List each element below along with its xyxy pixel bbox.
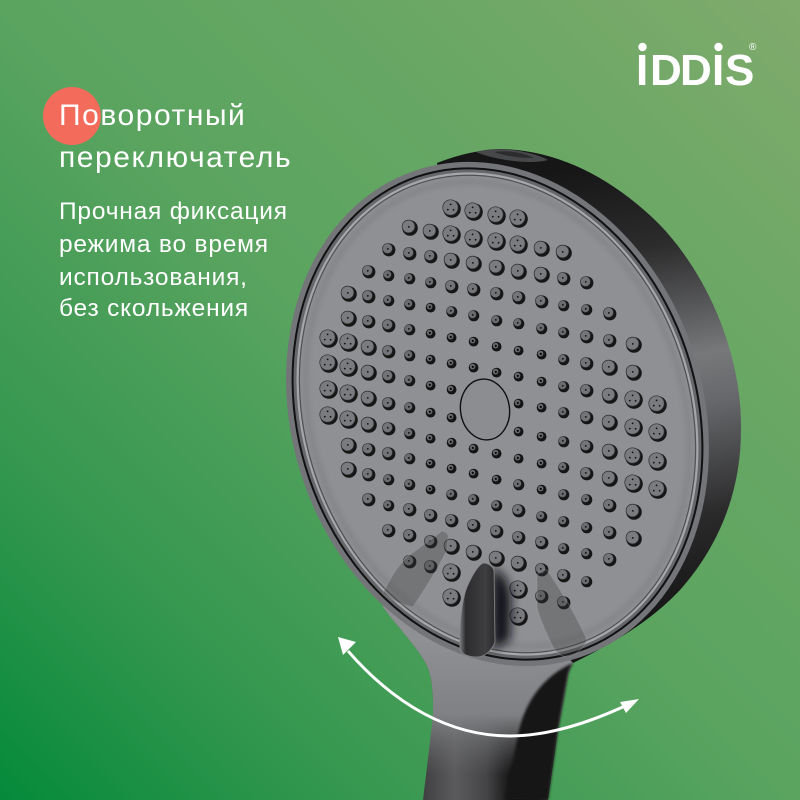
- description text: режима во время: [59, 231, 269, 258]
- ghost lever right position: [537, 570, 587, 657]
- iddis logo: ®: [749, 42, 757, 53]
- ghost lever left position: [383, 531, 448, 607]
- rotation arrow: [338, 637, 639, 736]
- spray face plate: [238, 122, 757, 706]
- description text: без скольжения: [59, 295, 249, 322]
- heading: [59, 99, 292, 174]
- heading: переключатель: [59, 141, 292, 174]
- spray nozzles: [320, 200, 667, 626]
- shower handle: [383, 560, 640, 800]
- description text: Прочная фиксация: [59, 198, 288, 225]
- center button of spray face: [456, 376, 514, 443]
- description text: использования,: [59, 264, 248, 291]
- heading: Поворотный: [59, 99, 246, 132]
- spray face rim rings: [220, 104, 775, 724]
- rotary switch lever: [460, 563, 495, 657]
- shower head back housing: [437, 149, 741, 663]
- description text: [59, 198, 288, 322]
- mode switch slider on top edge: [476, 149, 548, 162]
- coral accent circle: [43, 87, 101, 145]
- lever shadow on face: [492, 568, 511, 650]
- iddis logo: IDDIS: [636, 46, 754, 95]
